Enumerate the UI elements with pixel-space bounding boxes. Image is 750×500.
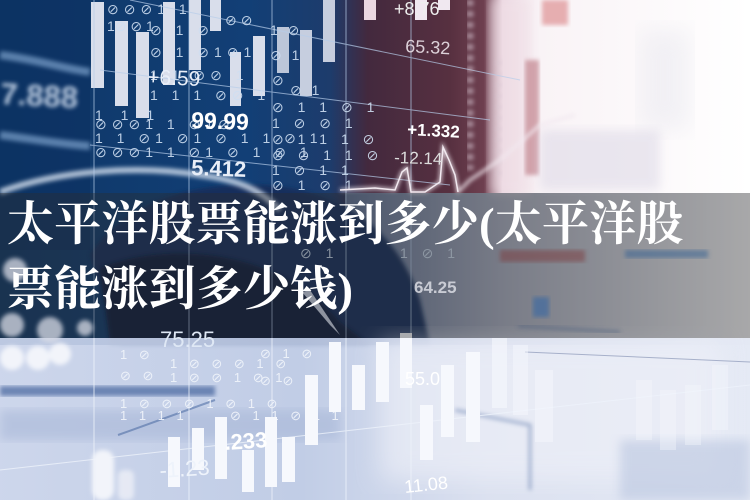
binary digit matrix: ⊘ 1 ⊘ 1 <box>272 177 358 193</box>
translucent title band <box>0 193 750 343</box>
blurred number 7.888: 7.888 <box>0 76 79 115</box>
title <box>7 199 684 316</box>
binary digit matrix: ⊘ 1 <box>270 47 302 63</box>
grid lines <box>90 0 520 338</box>
price line chart <box>340 115 575 192</box>
upper chart number labels: 99.99 <box>191 107 249 135</box>
lower chart number labels: .233 <box>224 427 268 455</box>
background stock photo montage: 1 ⊘ ⊘ 1 ⊘ 1 <box>170 370 286 385</box>
binary digit matrix: ⊘ 1 ⊘1⊘1 <box>150 44 256 60</box>
binary digit matrix: ⊘ 1 1 ⊘ 1 <box>272 99 379 115</box>
binary digit matrix: ⊘⊘⊘1 1 ⊘1 ⊘ 1 ⊘ 1 <box>95 144 313 160</box>
binary digit matrix: 1 ⊘ <box>270 22 302 38</box>
title: 太平洋股票能涨到多少(太平洋股 <box>7 199 684 251</box>
lower light photo area <box>0 338 750 500</box>
lower chart number labels: 64.25 <box>414 278 457 297</box>
binary digit matrix: ⊘⊘⊘1 1 ⊘1⊘ <box>95 116 235 132</box>
upper candlestick bars <box>91 0 450 118</box>
blurred lower-left bubbles <box>0 343 134 500</box>
binary digit matrix: 1 ⊘ 1 <box>400 245 460 261</box>
background stock photo montage: 1 ⊘ <box>120 347 154 362</box>
binary digit matrix: ⊘ <box>272 72 287 88</box>
lower chart number labels: 75.25 <box>160 327 215 352</box>
lower chart number labels: 55.0 <box>405 369 440 389</box>
binary digit matrix: 1 1 ⊘⊘ 1 <box>150 67 248 83</box>
dark hand and pen silhouette <box>90 185 430 345</box>
upper chart number labels: -12.14 <box>394 148 443 169</box>
lower chart number labels: 11.08 <box>403 473 449 497</box>
background stock photo montage: 1 ⊘ ⊘ ⊘ 1 ⊘ <box>170 356 290 371</box>
binary digit matrix: 1 ⊘ 1 1 <box>272 162 354 178</box>
background stock photo montage: 1 ⊘ ⊘ ⊘ 1 ⊘ 1 ⊘ <box>120 396 281 411</box>
binary digit matrix: 1 1 1 <box>95 107 161 123</box>
background stock photo montage: ⊘ ⊘ <box>120 368 157 383</box>
binary digit matrix <box>95 1 460 261</box>
upper photo background <box>0 0 750 345</box>
upper chart number labels: +1.332 <box>407 120 460 142</box>
blurred left figures and curves <box>0 55 280 210</box>
lower chart number labels: -1.23 <box>159 455 210 483</box>
lower grid and digits <box>0 338 750 500</box>
background stock photo montage: ⊘ 1 ⊘ <box>260 346 316 361</box>
background stock photo montage: 1 1 1 1 <box>120 408 188 423</box>
binary digit matrix: 1 ⊘ ⊘ 1 <box>272 115 358 131</box>
background stock photo montage: ⊘ ⊘ 1 <box>260 373 316 388</box>
binary digit matrix: ⊘ 1 <box>300 245 338 261</box>
upper chart number labels: +6.59 <box>147 66 201 91</box>
binary digit matrix: ⊘ 1 1 1 ⊘ <box>272 131 379 147</box>
blurred vertical bead columns <box>470 0 500 180</box>
binary digit matrix: ⊘ 1 ⊘ <box>150 22 214 38</box>
binary digit matrix: 1⊘ ⊘ 1 <box>107 18 154 34</box>
lower chart number labels <box>159 278 457 497</box>
binary digit matrix: 1 1 1 ⊘⊘ 1 <box>150 87 270 103</box>
upper chart number labels: 5.412 <box>191 155 247 182</box>
upper chart number labels: 65.32 <box>405 36 451 58</box>
binary digit matrix: ⊘ ⊘ 1 1 ⊘ <box>272 147 383 163</box>
binary digit matrix: ⊘ 1 <box>290 82 322 98</box>
upper chart number labels <box>147 0 460 182</box>
binary digit matrix: 1 1 ⊘1 ⊘1 ⊘ 1 1 ⊘ 1 <box>95 130 323 146</box>
lower white bars <box>168 333 728 492</box>
background stock photo montage: ⊘ 1 1 ⊘ 1 1 <box>230 408 343 423</box>
binary digit matrix: ⊘⊘ <box>225 12 256 28</box>
binary digit matrix: ⊘⊘⊘1 1 <box>107 1 192 17</box>
title: 票能涨到多少钱) <box>7 264 353 316</box>
